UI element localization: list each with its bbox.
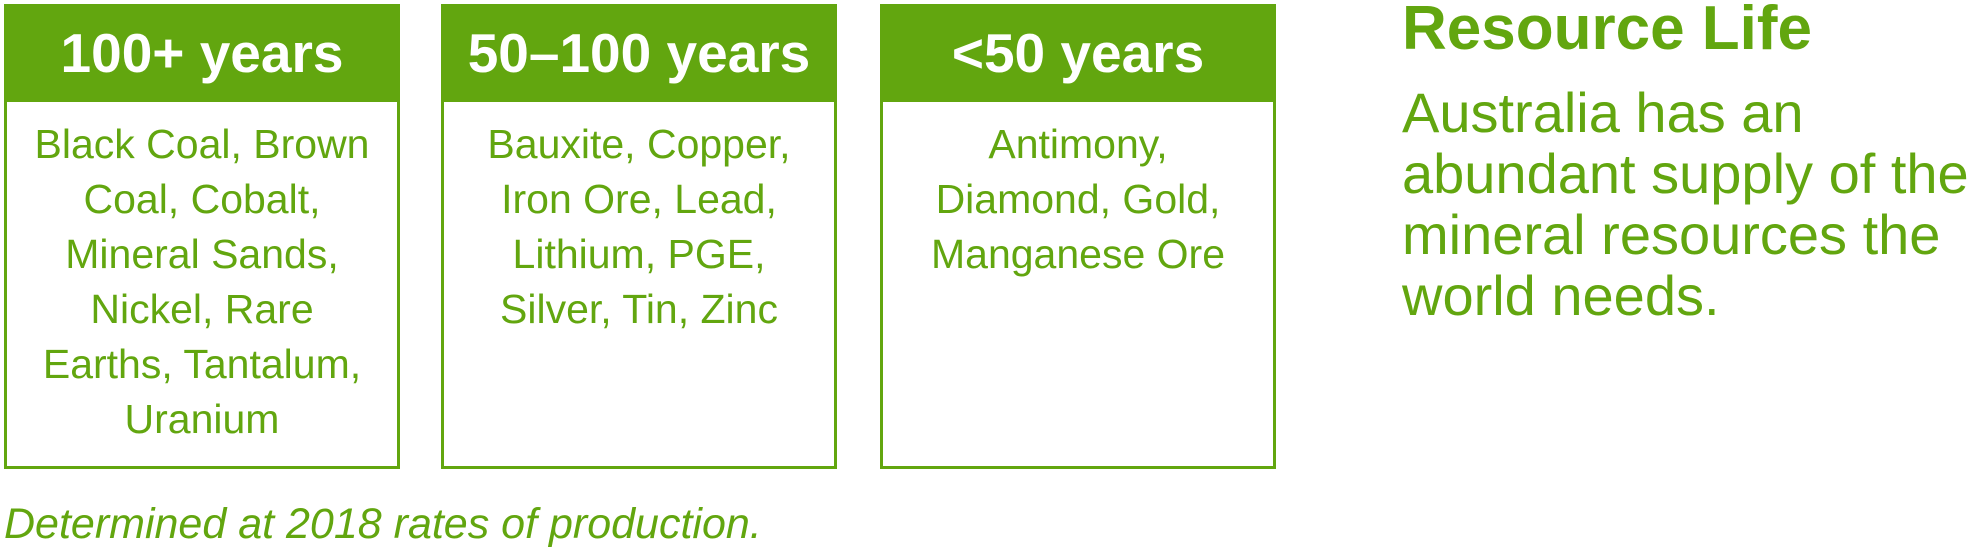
text: minerals 100+: Coal, Cobalt, <box>83 176 320 222</box>
panel: 50-100 years <box>441 4 837 469</box>
text: minerals <50: Manganese Ore <box>931 231 1225 277</box>
text: minerals 50-100: Bauxite, Copper, <box>487 121 791 167</box>
heading: <50 years: <50 years <box>952 22 1204 84</box>
text block: description: abundant supply of the <box>1402 142 1969 205</box>
text: minerals 100+ <box>35 121 369 442</box>
panel: <50 years <box>880 4 1276 469</box>
text: minerals 100+: Nickel, Rare <box>90 286 314 332</box>
text: minerals 50-100: Silver, Tin, Zinc <box>500 286 778 332</box>
text: minerals 100+: Black Coal, Brown <box>35 121 369 167</box>
footnote: Determined at 2018 rates of production. <box>4 500 762 548</box>
text: minerals <50: Antimony, <box>988 121 1168 167</box>
text: minerals <50 <box>931 121 1225 277</box>
heading: <50 years <box>883 7 1273 102</box>
text: minerals 100+: Earths, Tantalum, <box>43 341 361 387</box>
text: minerals 50-100 <box>487 121 791 332</box>
heading: 50-100 years <box>444 7 834 102</box>
text block: description <box>1402 81 1969 327</box>
text: minerals <50: Diamond, Gold, <box>936 176 1220 222</box>
heading: 100+ years: 100+ years <box>61 22 343 84</box>
heading: 50-100 years: 50–100 years <box>468 22 810 84</box>
text: minerals 50-100: Iron Ore, Lead, <box>501 176 777 222</box>
panel: 100+ years <box>4 4 400 469</box>
text: minerals 100+: Mineral Sands, <box>65 231 339 277</box>
text block: description: world needs. <box>1402 264 1720 327</box>
text block: description: Australia has an <box>1402 81 1804 144</box>
text: minerals 100+: Uranium <box>125 396 279 442</box>
text block: description: mineral resources the <box>1402 203 1940 266</box>
heading: 100+ years <box>7 7 397 102</box>
text: minerals 50-100: Lithium, PGE, <box>513 231 765 277</box>
